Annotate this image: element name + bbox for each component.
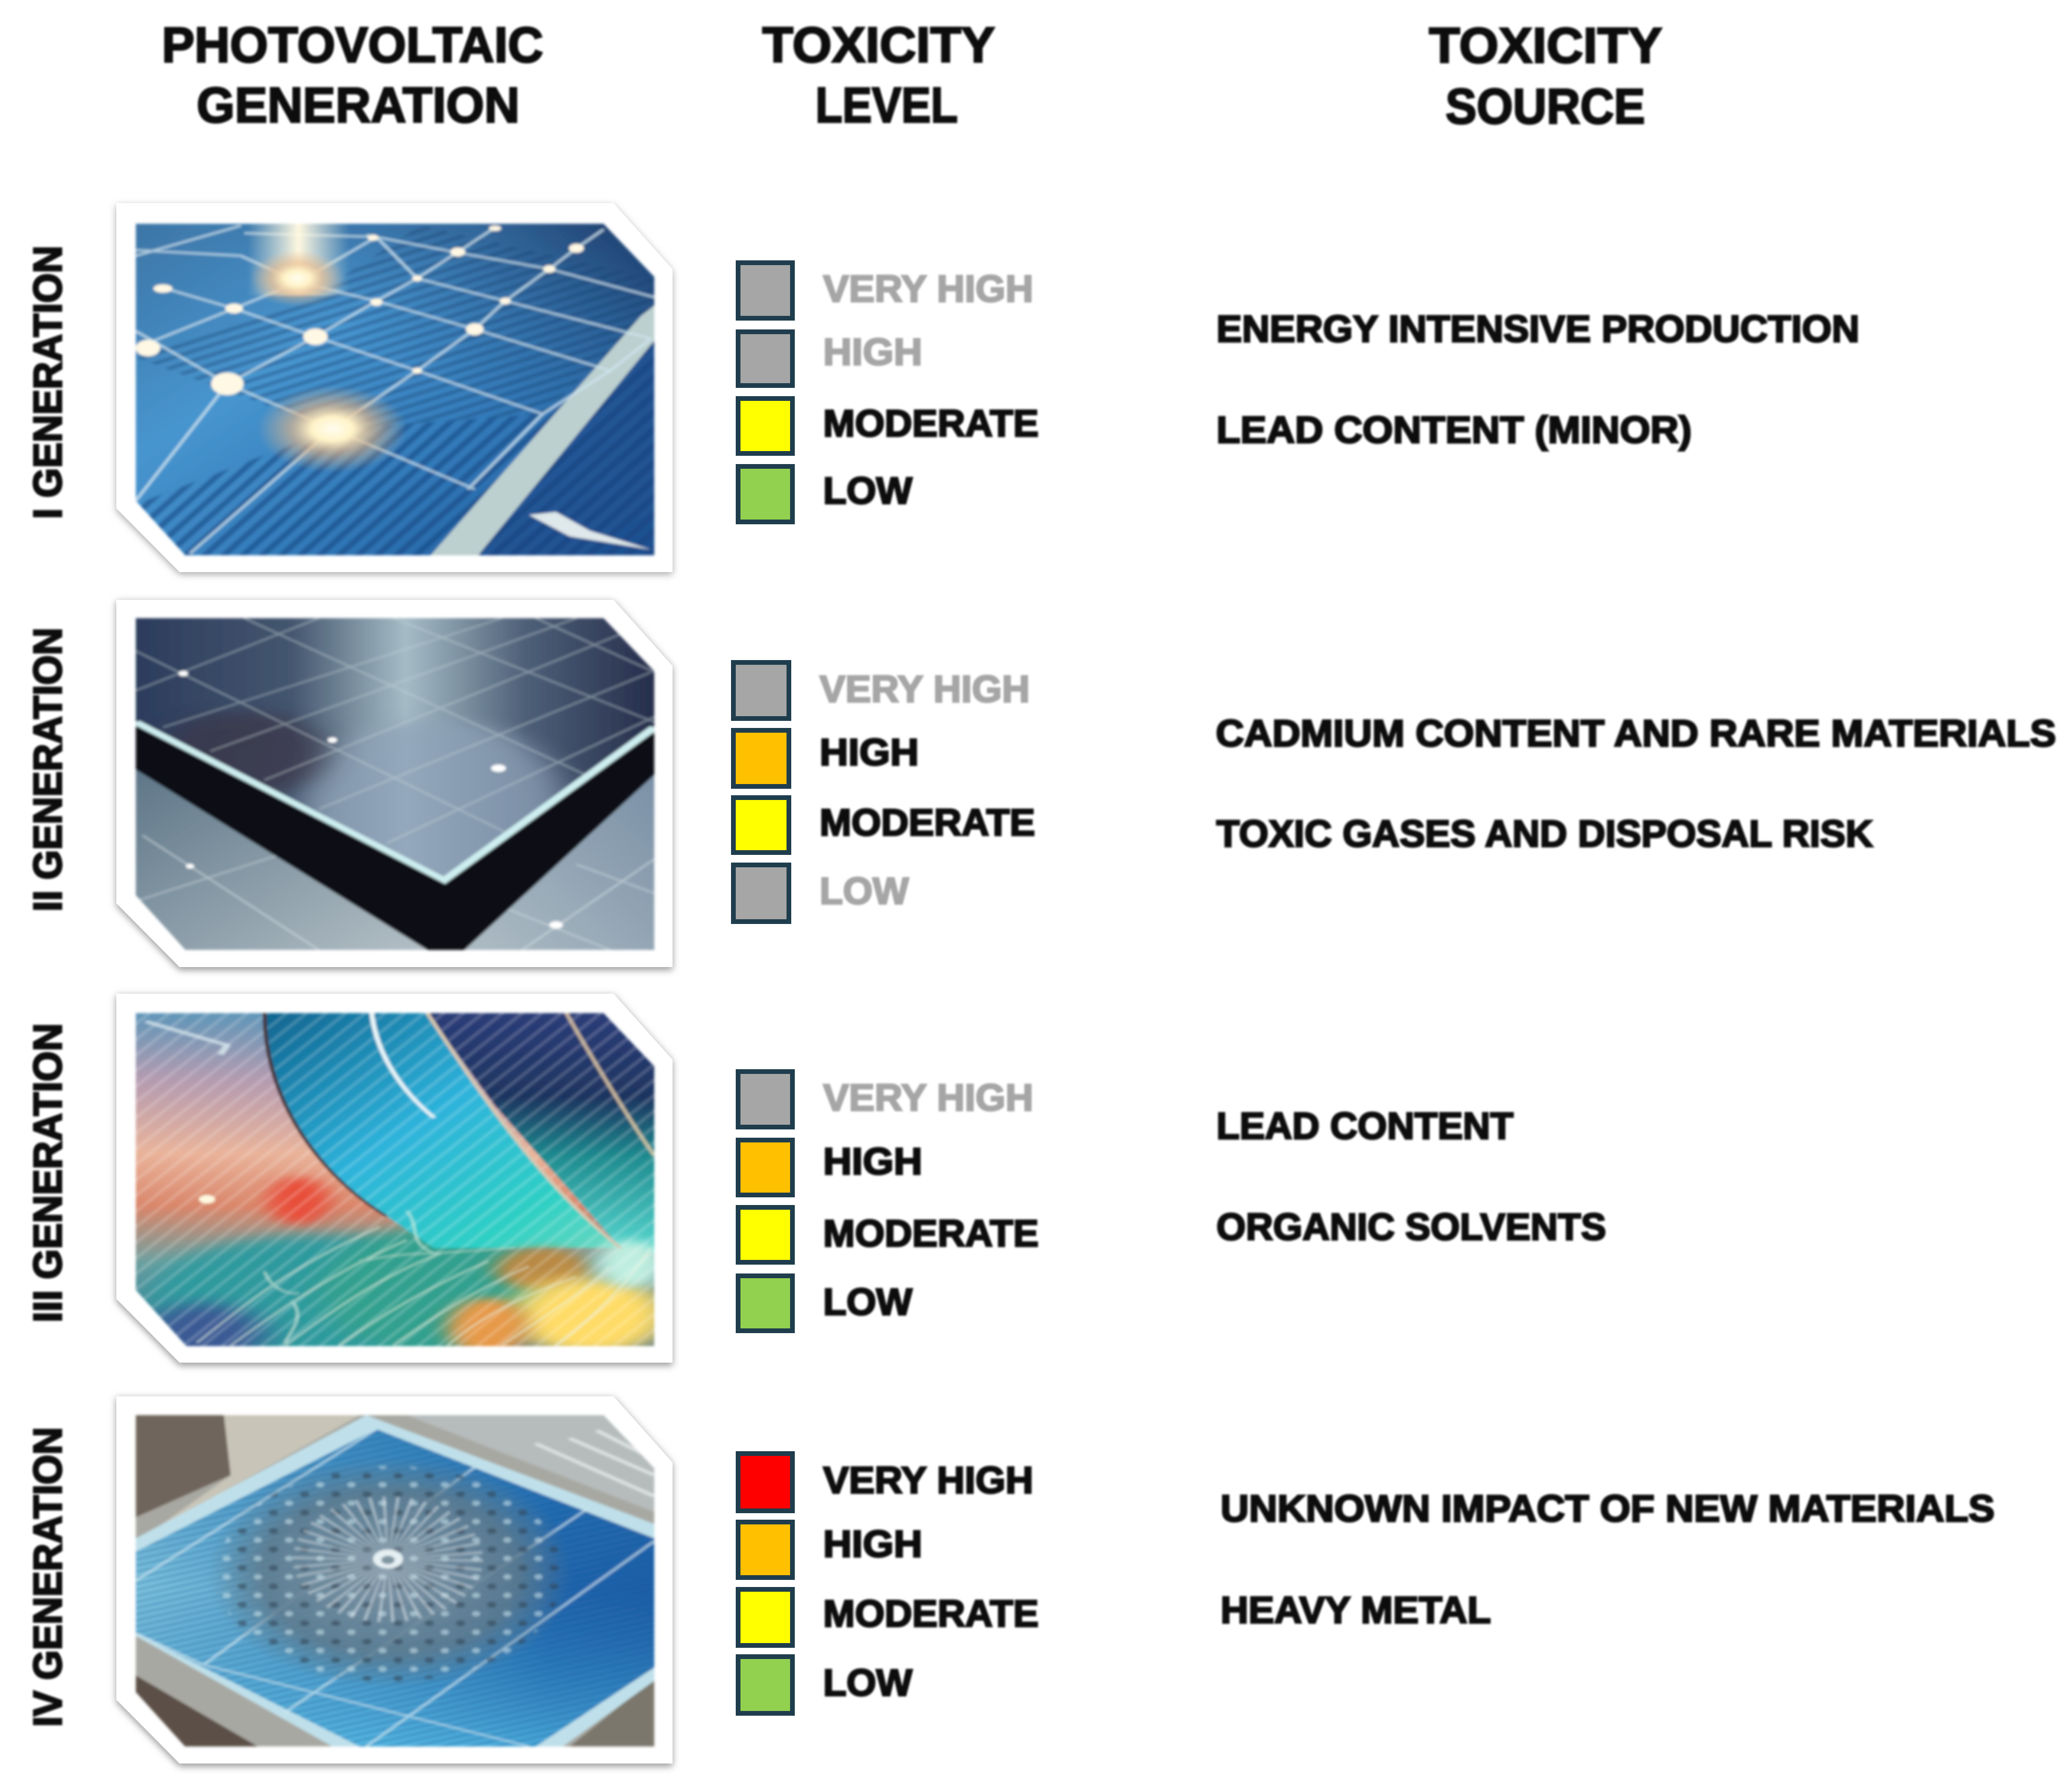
swatch: moderate xyxy=(738,1589,1039,1645)
vertical label: III generation: III GENERATION xyxy=(25,1023,70,1322)
swatch: high xyxy=(738,1522,922,1578)
vertical label: I generation: I GENERATION xyxy=(25,246,70,519)
swatch: moderate xyxy=(738,1207,1039,1262)
panel: II generation row xyxy=(25,600,2056,970)
panel: IV generation row xyxy=(25,1396,1995,1766)
image card: thin-film panel xyxy=(116,600,673,970)
swatch: high: HIGH xyxy=(820,731,919,773)
toxicity sources: I generation: ENERGY INTENSIVE PRODUCTION xyxy=(1216,308,1859,350)
toxicity level legend: III generation xyxy=(738,1072,1039,1331)
toxicity level legend: II generation xyxy=(733,662,1035,922)
toxicity sources: III generation xyxy=(1216,1105,1606,1248)
panel: I generation row xyxy=(25,203,1859,574)
swatch: very high inactive xyxy=(738,263,1033,318)
vertical label: IV generation: IV GENERATION xyxy=(25,1427,70,1727)
column heading: toxicity level: TOXICITY xyxy=(762,17,995,73)
toxicity sources: I generation xyxy=(1216,308,1859,451)
toxicity sources: II generation: TOXIC GASES AND DISPOSAL RISK xyxy=(1216,812,1873,855)
swatch: low xyxy=(738,466,913,522)
toxicity sources: III generation: LEAD CONTENT xyxy=(1216,1105,1513,1147)
swatch: high: HIGH xyxy=(823,1140,922,1183)
swatch: high xyxy=(733,730,919,786)
toxicity level legend: IV generation xyxy=(738,1454,1039,1713)
vertical label: II generation: II GENERATION xyxy=(25,628,70,912)
swatch: moderate xyxy=(733,798,1035,853)
swatch: very high xyxy=(738,1454,1033,1511)
swatch: low: LOW xyxy=(823,1661,913,1704)
swatch: moderate: MODERATE xyxy=(823,1592,1039,1635)
toxicity sources: III generation: ORGANIC SOLVENTS xyxy=(1216,1206,1606,1248)
toxicity sources: II generation: CADMIUM CONTENT AND RARE MATERIALS xyxy=(1216,712,2056,755)
swatch: very high inactive xyxy=(738,1072,1033,1127)
toxicity sources: I generation: LEAD CONTENT (MINOR) xyxy=(1216,409,1692,451)
toxicity sources: IV generation: UNKNOWN IMPACT OF NEW MATERIALS xyxy=(1221,1487,1995,1530)
column heading: photovoltaic generation: GENERATION xyxy=(197,77,520,133)
column heading: toxicity source: SOURCE xyxy=(1445,79,1645,134)
swatch: very high inactive: VERY HIGH xyxy=(823,1076,1033,1119)
column heading: photovoltaic generation: PHOTOVOLTAIC xyxy=(162,17,543,73)
swatch: low xyxy=(738,1657,913,1713)
swatch: low: LOW xyxy=(823,469,913,512)
swatch: high inactive: HIGH xyxy=(823,331,922,373)
swatch: moderate: MODERATE xyxy=(820,801,1035,844)
swatch: moderate: MODERATE xyxy=(823,1212,1039,1255)
image card: flexible organic panel xyxy=(116,994,673,1367)
column heading: toxicity source: TOXICITY xyxy=(1429,18,1662,73)
swatch: moderate: MODERATE xyxy=(823,402,1039,445)
swatch: low inactive xyxy=(733,865,909,922)
toxicity sources: IV generation xyxy=(1221,1487,1995,1631)
image card: crystalline silicon panel xyxy=(116,203,673,574)
swatch: low xyxy=(738,1276,913,1331)
swatch: high inactive xyxy=(738,331,922,386)
toxicity sources: II generation xyxy=(1216,712,2056,855)
swatch: high xyxy=(738,1140,922,1195)
swatch: very high inactive xyxy=(733,662,1030,719)
column heading: toxicity level: LEVEL xyxy=(815,77,958,133)
swatch: low: LOW xyxy=(823,1281,913,1323)
column heading: toxicity source xyxy=(1429,18,1662,134)
swatch: very high inactive: VERY HIGH xyxy=(820,668,1030,710)
column heading: toxicity level xyxy=(762,17,995,133)
swatch: moderate xyxy=(738,399,1039,453)
swatch: very high: VERY HIGH xyxy=(823,1459,1033,1501)
swatch: very high inactive: VERY HIGH xyxy=(823,267,1033,310)
image card: nanomaterial panel xyxy=(116,1396,673,1766)
toxicity level legend: I generation xyxy=(738,263,1039,522)
panel: III generation row xyxy=(25,994,1606,1367)
swatch: low inactive: LOW xyxy=(820,870,909,912)
column heading: photovoltaic generation xyxy=(162,17,543,133)
swatch: high: HIGH xyxy=(823,1523,922,1565)
toxicity sources: IV generation: HEAVY METAL xyxy=(1221,1589,1491,1631)
